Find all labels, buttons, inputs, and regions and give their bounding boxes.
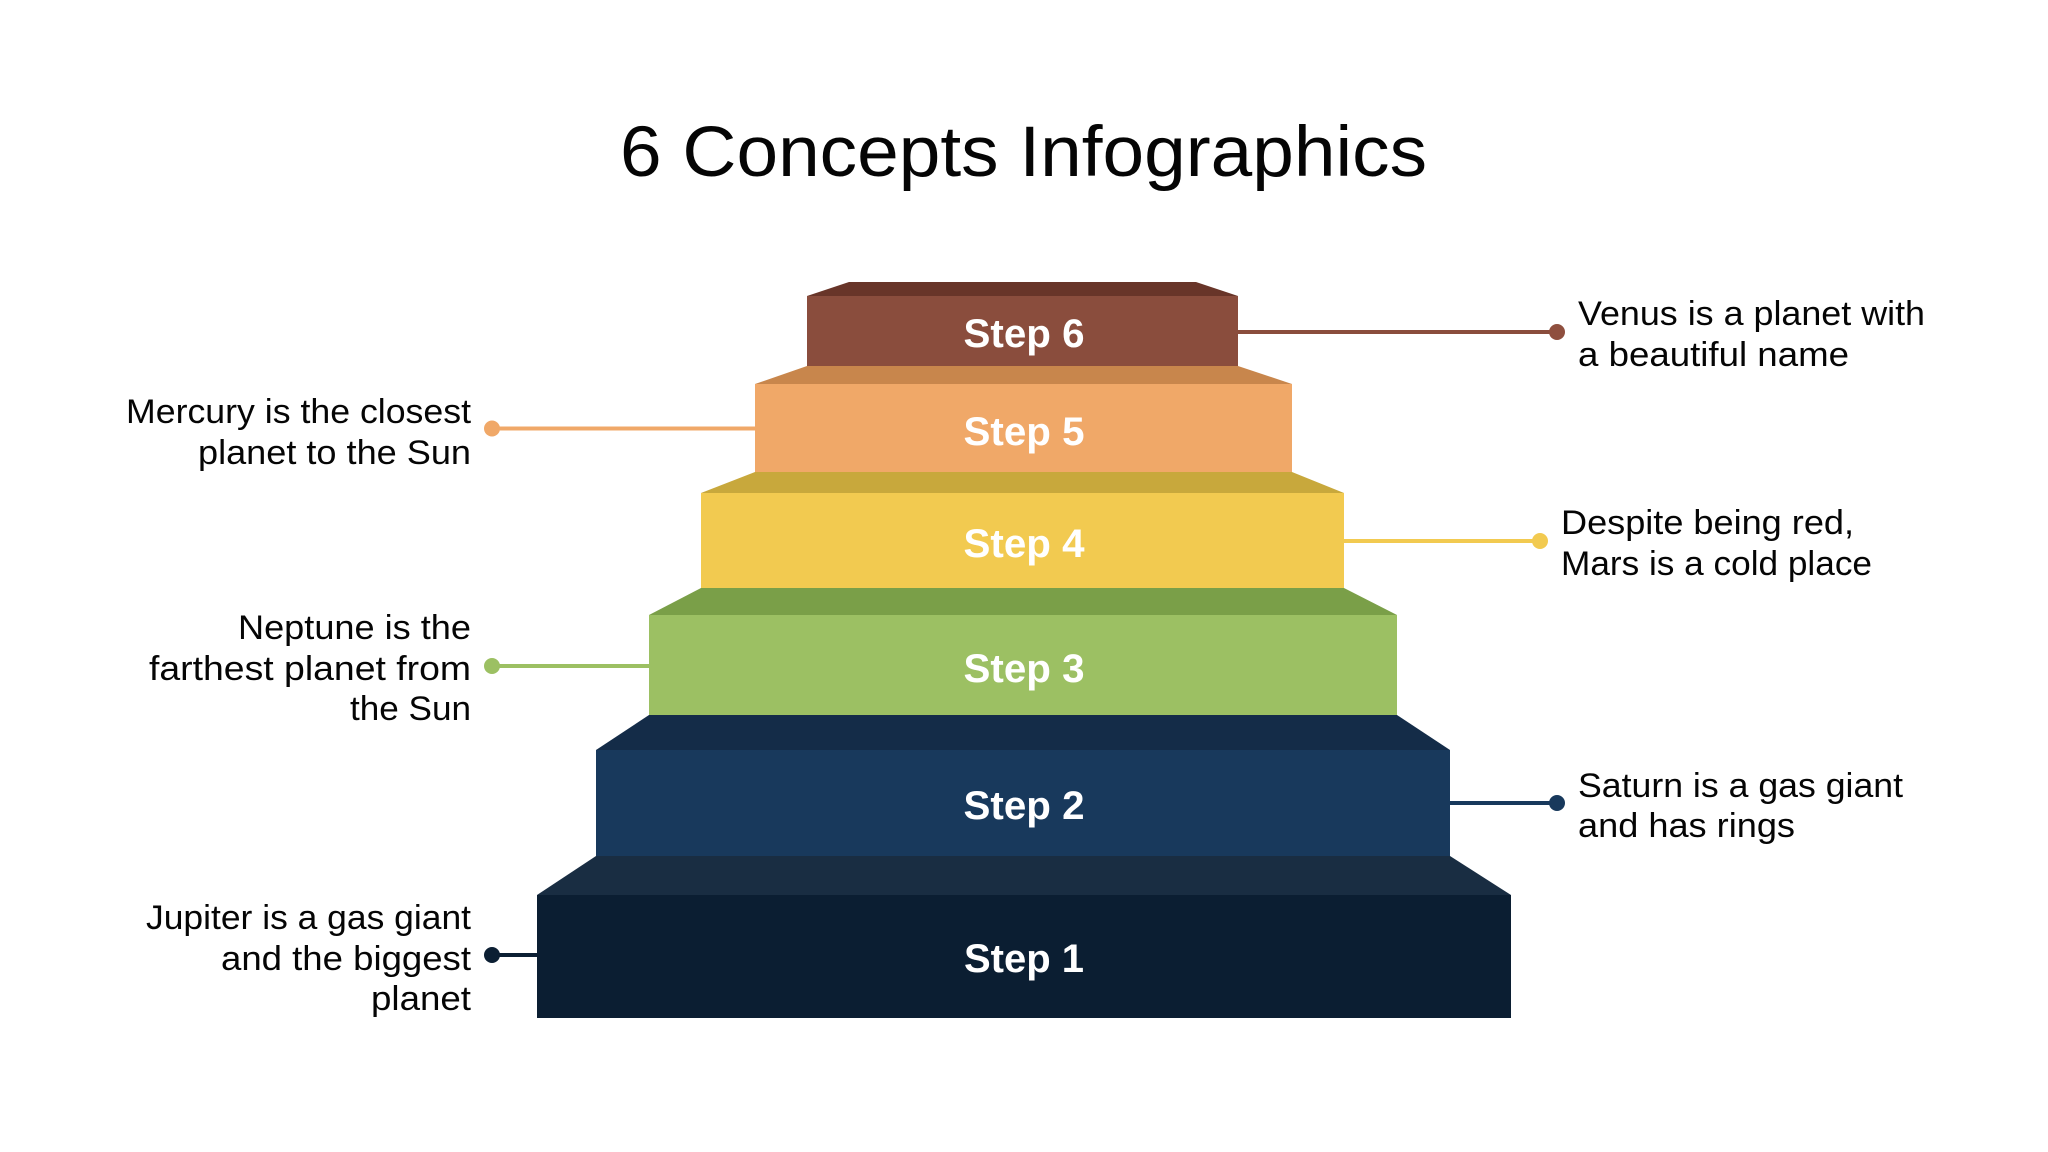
connector: step 6 [1238,324,1565,340]
step 4 block [701,472,1344,588]
step 2 block [596,715,1450,856]
text: Jupiter: and the biggest [221,940,472,978]
text: Jupiter: planet [371,980,472,1018]
step 1 block [537,856,1511,1018]
step 5 block [755,366,1292,472]
connector: step 4 [1344,533,1548,549]
text: Mars: Despite being red, [1561,504,1854,542]
text: Neptune: the Sun [350,690,471,728]
title: 6 Concepts Infographics [620,113,1427,192]
step 5 block: Step 5 [964,410,1084,454]
text: Mercury [126,393,472,472]
step 6 block: Step 6 [964,312,1084,356]
text: Jupiter: Jupiter is a gas giant [146,899,472,937]
text: Neptune: farthest planet from [149,650,471,688]
step 6 block [807,282,1238,366]
step 3 block [649,588,1397,715]
text: Venus: a beautiful name [1578,336,1849,374]
text: Mercury: Mercury is the closest [126,393,472,431]
text: Saturn [1578,767,1904,845]
text: Mars: Mars is a cold place [1561,545,1872,583]
text: Saturn: Saturn is a gas giant [1578,767,1904,805]
step 3 block: Step 3 [964,647,1084,691]
text: Mars [1561,504,1872,583]
step 4 block: Step 4 [964,522,1085,566]
step 2 block: Step 2 [964,784,1084,828]
connector: step 3 [484,658,649,674]
pyramid [537,282,1511,1018]
text: Mercury: planet to the Sun [198,434,471,472]
connector: step 1 [484,947,537,963]
text: Venus: Venus is a planet with [1578,295,1925,333]
text: Jupiter [146,899,472,1018]
text: Venus [1578,295,1925,374]
text: Saturn: and has rings [1578,807,1795,845]
connector: step 2 [1450,795,1565,811]
connector: step 5 [484,420,755,436]
text: Neptune [149,609,471,728]
step 1 block: Step 1 [964,937,1084,981]
text: Neptune: Neptune is the [238,609,471,647]
